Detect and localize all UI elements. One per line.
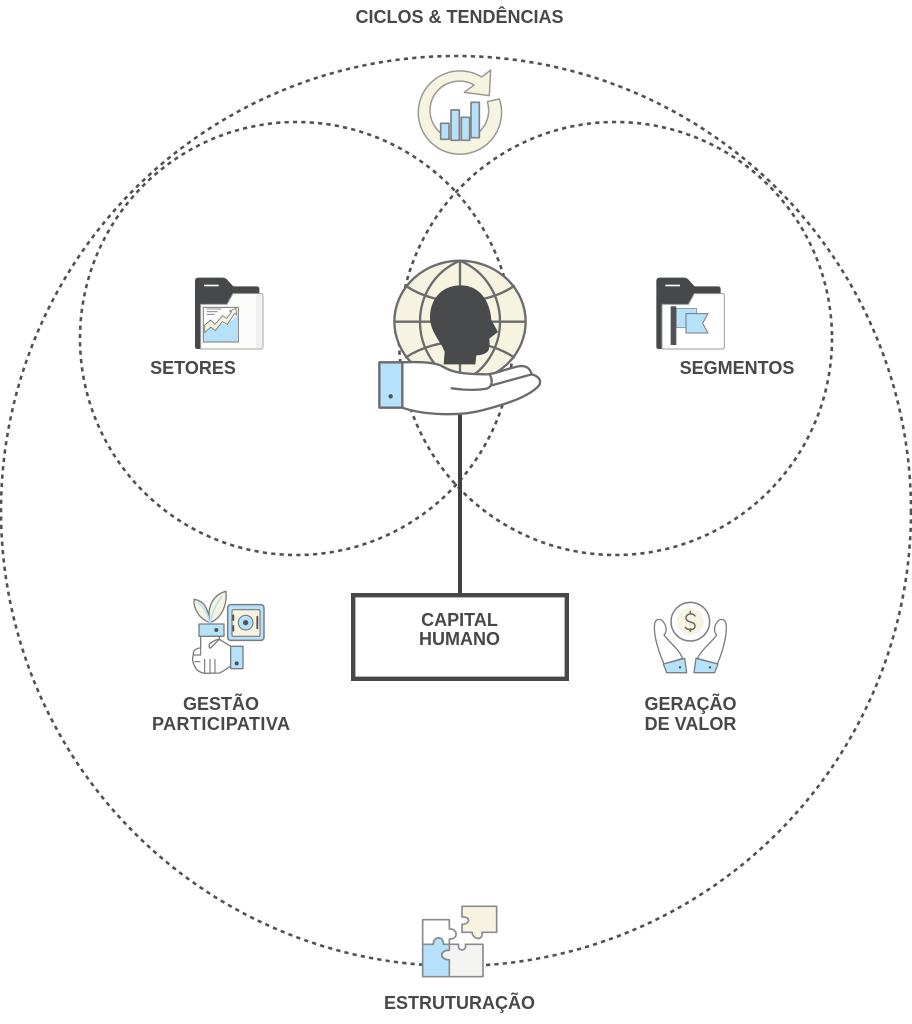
- head silhouette: [430, 285, 498, 364]
- icon: folder with chart: [195, 278, 263, 349]
- icon: cycle with bar chart: [418, 70, 502, 154]
- label: gestão participativa: GESTÃO: [183, 693, 259, 714]
- connector line: [458, 410, 462, 595]
- box: capital humano: HUMANO: [419, 629, 500, 649]
- label: gestão participativa: [152, 693, 290, 734]
- label: estruturação: ESTRUTURAÇÃO: [384, 992, 535, 1013]
- hand: [402, 362, 540, 414]
- label: geração de valor: DE VALOR: [645, 714, 736, 734]
- right circle: segmentos: [399, 122, 832, 555]
- globe: [394, 261, 526, 383]
- heading: ciclos e tendências: CICLOS & TENDÊNCIAS: [355, 6, 564, 27]
- left circle: setores: [80, 122, 513, 555]
- box: capital humano: CAPITAL: [421, 610, 498, 630]
- icon: folder with flags: [656, 278, 724, 349]
- box: capital humano: [353, 595, 567, 679]
- icon: plant, safe and handshake: [193, 591, 264, 673]
- label: geração de valor: GERAÇÃO: [644, 693, 737, 714]
- icon: hands holding coin: [654, 602, 726, 673]
- label: geração de valor: [644, 693, 737, 734]
- icon: puzzle pieces: [423, 906, 497, 977]
- cuff: [379, 362, 402, 408]
- icon: globe with head on hand: [379, 261, 540, 414]
- label: gestão participativa: PARTICIPATIVA: [152, 714, 290, 734]
- label: segmentos: SEGMENTOS: [680, 358, 794, 378]
- label: setores: SETORES: [150, 358, 236, 378]
